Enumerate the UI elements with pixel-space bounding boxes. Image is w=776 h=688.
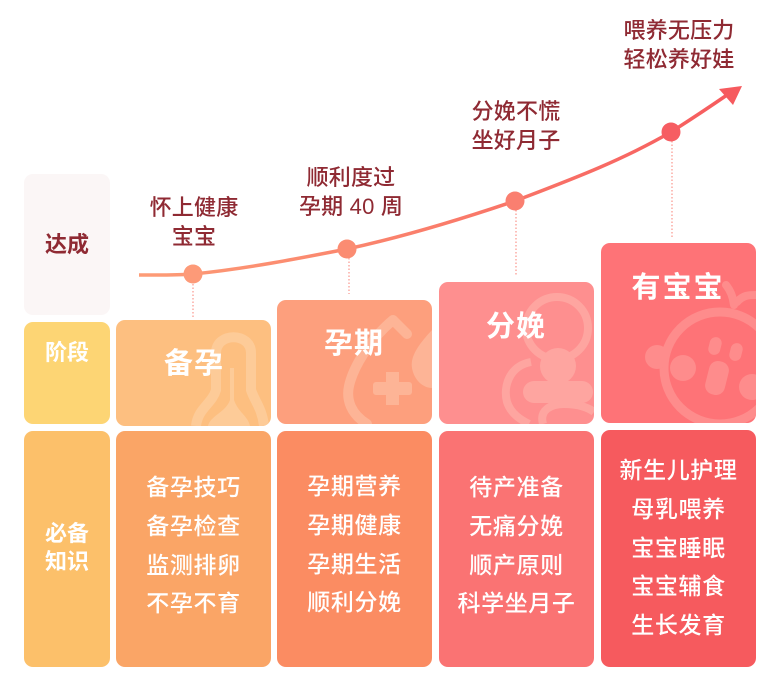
goal text: 有宝宝 [623, 18, 735, 72]
knowledge panel: 分娩: 无痛分娩 [469, 513, 564, 539]
row label: 阶段 [24, 322, 110, 424]
milestone dots [184, 122, 680, 284]
knowledge panel: 有宝宝 [601, 430, 756, 667]
knowledge panel: 孕期: 顺利分娩 [307, 589, 402, 615]
knowledge panel: 分娩: 科学坐月子 [458, 590, 576, 616]
icon: baby face [645, 281, 756, 423]
knowledge panel: 备孕: 备孕检查 [146, 513, 241, 539]
goal text: 分娩: 坐好月子 [472, 128, 560, 152]
knowledge panel: 有宝宝: 宝宝辅食 [631, 573, 726, 599]
knowledge panel: 有宝宝: 宝宝睡眠 [631, 535, 726, 561]
knowledge panel: 备孕: 不孕不育 [146, 590, 241, 616]
knowledge panel: 分娩: 顺产原则 [469, 552, 564, 578]
knowledge panel: 有宝宝: 母乳喂养 [631, 496, 726, 522]
row label: 阶段: 阶段 [45, 340, 89, 365]
goal text: 孕期 [299, 165, 403, 218]
stage title: 孕期 [324, 328, 384, 360]
goal text: 分娩: 分娩不慌 [472, 99, 560, 124]
knowledge panel: 孕期: 孕期生活 [307, 551, 402, 577]
stage card: 备孕 [116, 320, 271, 426]
knowledge panel: 分娩 [439, 431, 594, 667]
row label: 达成: 达成 [45, 232, 89, 257]
icon: blood drops with cross [343, 315, 432, 424]
stage card: 有宝宝 [601, 243, 756, 423]
stage title: 分娩 [486, 311, 546, 343]
stage title: 备孕 [164, 348, 224, 380]
stage card: 分娩 [439, 282, 594, 424]
knowledge panel: 分娩: 待产准备 [469, 474, 564, 500]
knowledge panel: 孕期 [277, 431, 432, 667]
goal text: 备孕: 怀上健康 [150, 195, 238, 220]
goal text: 分娩 [472, 99, 560, 152]
icon: pacifier [502, 293, 594, 424]
knowledge panel: 孕期: 孕期健康 [307, 512, 402, 538]
stage card: 孕期 [277, 300, 432, 424]
icon: thermometer flask [191, 332, 268, 426]
row label: 必备知识: 知识 [45, 549, 89, 574]
knowledge panel: 孕期: 孕期营养 [307, 473, 402, 499]
knowledge panel: 备孕 [116, 431, 271, 667]
knowledge panel: 备孕: 监测排卵 [146, 552, 241, 578]
goal text: 备孕 [150, 195, 238, 248]
goal text: 备孕: 宝宝 [172, 224, 216, 248]
row label: 必备知识 [24, 431, 110, 667]
arrow head [719, 86, 742, 105]
goal text: 有宝宝: 喂养无压力 [623, 18, 735, 43]
knowledge panel: 有宝宝: 生长发育 [631, 612, 726, 638]
row label: 达成 [24, 174, 110, 315]
goal text: 孕期: 顺利度过 [307, 165, 395, 190]
stage title: 有宝宝 [631, 272, 725, 304]
knowledge panel: 有宝宝: 新生儿护理 [620, 457, 738, 483]
goal text: 孕期: 孕期 40 周 [299, 194, 403, 218]
knowledge panel: 备孕: 备孕技巧 [146, 474, 241, 500]
goal text: 有宝宝: 轻松养好娃 [623, 46, 735, 72]
row label: 必备知识: 必备 [45, 521, 89, 546]
